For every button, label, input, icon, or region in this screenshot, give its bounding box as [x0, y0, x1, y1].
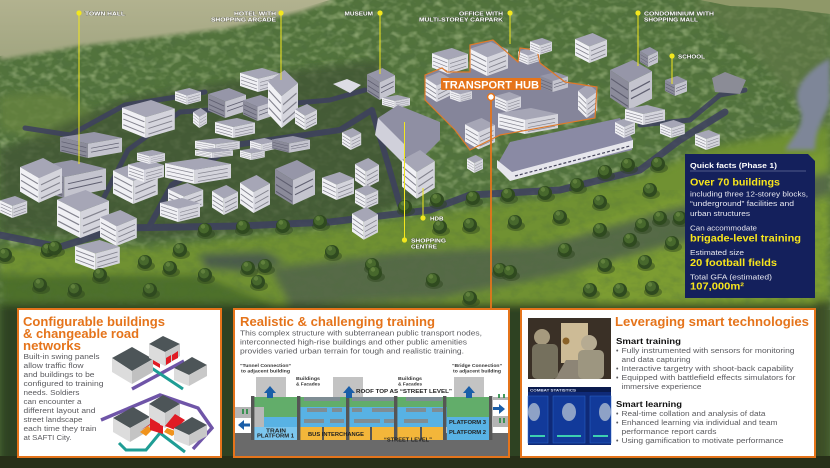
diagram labels: “STREET LEVEL” [384, 438, 432, 444]
smart learning list: • [616, 411, 619, 418]
sky haze [0, 0, 335, 60]
smart training list: • [616, 366, 619, 373]
label: HDB [420, 188, 444, 222]
diagram: closed road layout [112, 336, 207, 389]
diagram labels: TRAIN [266, 428, 286, 434]
panel: quick facts: Estimated size [690, 250, 744, 257]
diagram labels [240, 363, 502, 444]
diagram labels: ROOF TOP AS “STREET LEVEL” [356, 389, 452, 395]
body text [240, 330, 482, 356]
body text: This complex structure with subterranean public transport nodes, [240, 330, 482, 338]
label: condominium with shopping mall: SHOPPING MALL [644, 18, 699, 24]
river [785, 58, 830, 150]
smart training list: Smart training [616, 337, 681, 346]
panel: quick facts: urban structures [690, 211, 751, 218]
panel: realistic and challenging training [234, 309, 509, 457]
diagram labels: “Bridge Connection” [452, 363, 502, 368]
body text: needs. Soldiers [24, 390, 80, 397]
smart learning list: performance report cards [622, 429, 717, 436]
heading: configurable buildings [23, 315, 165, 353]
buildings: long hall [467, 118, 635, 181]
diagram labels: to adjacent building [453, 368, 501, 374]
diagram labels: BUS INTERCHANGE [308, 432, 364, 438]
smart training list: immersive experience [622, 384, 702, 391]
heading: leveraging smart technologies: Leveraging smart technologies [615, 315, 809, 329]
diagram labels: to adjacent building [241, 368, 290, 374]
label: hotel with shopping arcade: SHOPPING ARCADE [211, 18, 276, 24]
heading: configurable buildings: Configurable buildings [23, 315, 165, 329]
transport hub complex [425, 40, 597, 150]
smart training list: Fully instrumented with sensors for monitoring [622, 348, 795, 355]
heading: configurable buildings: networks [23, 339, 81, 353]
photo: combat statistics screen [528, 387, 611, 445]
label: condominium with shopping mall [635, 10, 714, 66]
smart training list [616, 337, 796, 391]
roads [0, 90, 745, 247]
label: transport hub [441, 78, 541, 309]
diagram labels: Buildings [296, 376, 321, 381]
body text: provides varied urban terrain for tough and realistic training. [240, 348, 464, 356]
smart learning list: Enhanced learning via individual and team [622, 420, 778, 427]
hub outline [425, 40, 597, 150]
label: condominium with shopping mall: CONDOMINIUM WITH [644, 12, 714, 18]
panel: leveraging smart technologies [521, 309, 815, 457]
buildings: central block [333, 68, 440, 199]
smart training list: • [616, 375, 619, 382]
label: shopping centre [402, 122, 446, 250]
photo: combat statistics screen: COMBAT STATISTICS [530, 388, 577, 392]
label: town hall [76, 10, 126, 164]
photo: soldiers in a doorway [528, 318, 611, 379]
smart learning list: Real-time collation and analysis of data [622, 411, 766, 418]
smart learning list: Smart learning [616, 400, 682, 409]
label: school [669, 53, 706, 84]
buildings: west cluster [0, 68, 379, 270]
smart training list: • [616, 348, 619, 355]
label: museum: MUSEUM [344, 12, 373, 18]
diagram labels: & Facades [398, 382, 423, 386]
panel: quick facts: 20 football fields [690, 258, 777, 269]
smart learning list [616, 400, 784, 445]
label: shopping centre: SHOPPING [411, 238, 446, 244]
body text: Built-in swing panels [24, 354, 100, 361]
body text [24, 354, 104, 442]
panel: quick facts: Total GFA (estimated) [690, 274, 772, 282]
body text: and buildings to be [24, 372, 95, 379]
panel: quick facts: 107,000m² [690, 282, 745, 292]
panel: quick facts [685, 154, 815, 298]
panel: quick facts: including three 12-storey blocks, [690, 192, 808, 198]
trees on the open field [0, 157, 690, 307]
label: transport hub: TRANSPORT HUB [443, 80, 539, 92]
body text: configured to training [24, 381, 104, 388]
diagram labels: Buildings [398, 376, 423, 381]
diagram labels: PLATFORM 2 [449, 430, 486, 436]
smart learning list: • [616, 420, 619, 427]
label: town hall: TOWN HALL [85, 12, 126, 18]
body text: street landscape [24, 417, 83, 424]
label: museum [344, 10, 383, 74]
body text: can encounter a [24, 399, 82, 406]
diagram labels: “Tunnel Connection” [240, 363, 291, 368]
body text: allow traffic flow [24, 363, 85, 370]
blue arrows [238, 386, 505, 430]
diagram labels: & Facades [296, 382, 321, 386]
body text: interconnected high-rise buildings and other public amenities [240, 340, 468, 346]
label: office with multi-storey carpark [419, 10, 513, 44]
smart learning list: Using gamification to motivate performance [622, 438, 784, 445]
label: office with multi-storey carpark: OFFICE WITH [459, 12, 503, 18]
smart training list: and data capturing [622, 357, 691, 364]
heading: configurable buildings: & changeable road [23, 327, 139, 341]
panel: quick facts: “underground” facilities and [690, 201, 794, 208]
smart learning list: • [616, 438, 619, 445]
panel: quick facts: Can accommodate [690, 226, 757, 232]
body text: each time they train [24, 426, 97, 433]
panel: quick facts: Over 70 buildings [690, 178, 780, 188]
label: school: SCHOOL [678, 54, 706, 60]
panel: configurable buildings [18, 309, 221, 457]
smart training list: Equipped with battlefield effects simulators for [622, 375, 796, 382]
smart training list: Interactive targetry with shoot-back capability [622, 366, 794, 373]
panel: quick facts: Quick facts (Phase 1) [690, 161, 778, 170]
buildings: east cluster [530, 33, 746, 150]
body text: at SAFTI City. [24, 435, 72, 442]
cross-section diagram [235, 363, 508, 456]
heading: realistic training: Realistic & challenging training [240, 315, 435, 329]
label: HDB: HDB [430, 216, 444, 222]
body text: different layout and [24, 408, 96, 415]
label: office with multi-storey carpark: MULTI-STOREY CARPARK [419, 18, 503, 24]
diagram labels: PLATFORM 3 [449, 420, 486, 426]
diagram: open road layout [101, 395, 212, 452]
diagram labels: PLATFORM 1 [257, 434, 294, 440]
people marks [243, 394, 504, 423]
label: hotel with shopping arcade: HOTEL WITH [234, 12, 276, 18]
panel: quick facts: brigade-level training [690, 234, 801, 244]
label: shopping centre: CENTRE [411, 244, 437, 250]
label: hotel with shopping arcade [211, 10, 284, 80]
